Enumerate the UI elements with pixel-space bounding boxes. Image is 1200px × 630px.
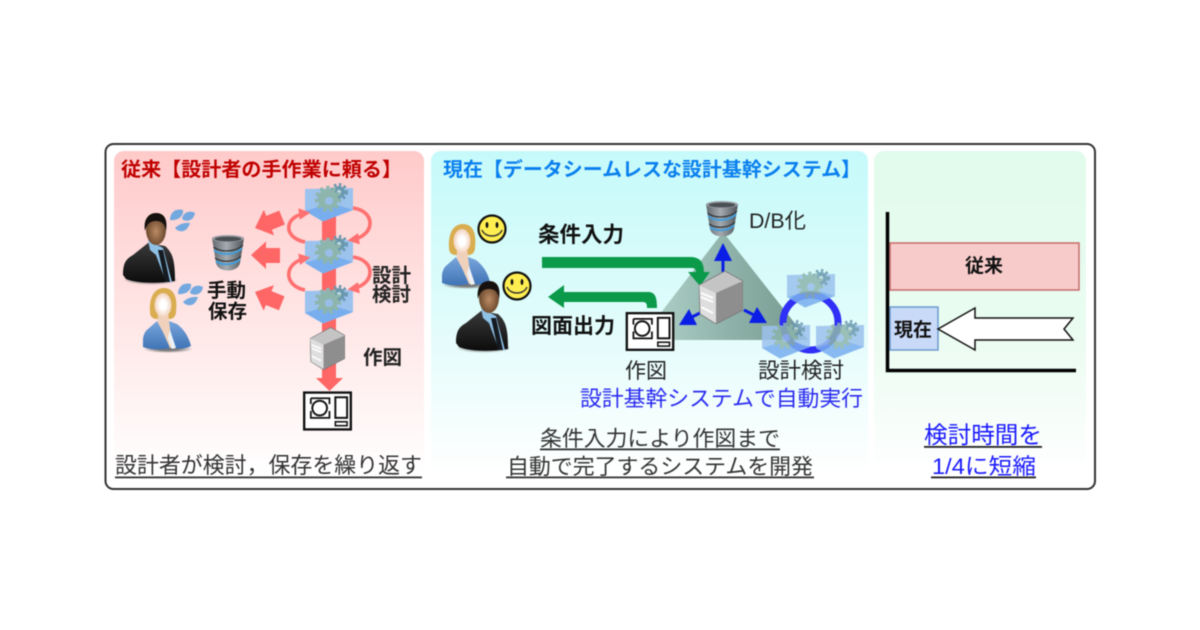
- bar: current: [890, 307, 938, 350]
- chart: time comparison: [888, 212, 1079, 370]
- icon: drawing: [627, 313, 673, 350]
- label: drawing output: 図面出力: [531, 315, 615, 338]
- panel background: [431, 151, 868, 473]
- heading: current: 現在【データシームレスな設計基幹システム】: [443, 158, 861, 181]
- arrows: save to database: [250, 205, 287, 316]
- icon: design cube right: [816, 322, 864, 358]
- bar: current: 現在: [894, 319, 932, 341]
- label: automatic execution: 設計基幹システムで自動実行: [580, 386, 863, 411]
- icon: female user: [442, 224, 492, 289]
- icon: server: [699, 271, 743, 324]
- caption: result: 検討時間を: [924, 422, 1042, 448]
- arrow: input green: [542, 257, 710, 286]
- label: condition input: 条件入力: [538, 223, 624, 247]
- panel: current system: [431, 151, 868, 479]
- icon: smiley 1: [478, 216, 506, 242]
- icon: server: [310, 327, 345, 370]
- icon: design cube left: [762, 322, 810, 358]
- caption: result: [924, 422, 1042, 479]
- arrow: output green: [548, 285, 657, 308]
- icon: database: [212, 235, 244, 270]
- icon: drawing: [304, 393, 351, 429]
- outer frame: [106, 144, 1095, 489]
- panel background: [874, 151, 1086, 473]
- icon: sweat drops male: [170, 210, 195, 231]
- bar: conventional: 従来: [965, 255, 1003, 277]
- icon: male user: [456, 281, 512, 353]
- caption: current: 自動で完了するシステムを開発: [507, 454, 813, 479]
- icon: database: [706, 201, 738, 236]
- arrows: iteration loops: [289, 208, 370, 290]
- arrow: reduction: [938, 308, 1073, 350]
- label: design study: 設計検討: [758, 359, 844, 383]
- caption: result: 1/4に短縮: [932, 454, 1036, 479]
- icon: design cube 2: [305, 236, 353, 274]
- caption: conventional: 設計者が検討，保存を繰り返す: [115, 453, 422, 478]
- bar: conventional: [890, 243, 1079, 290]
- diagram triangle: [640, 232, 808, 340]
- panel: result: [874, 151, 1086, 479]
- icon: male designer: [123, 213, 179, 285]
- label: drafting: 作図: [363, 347, 402, 369]
- icon: sweat drops female: [178, 284, 203, 305]
- icon: smiley 2: [504, 272, 530, 300]
- arrows: blue system flows: [679, 243, 767, 325]
- ring: design loop: [783, 295, 838, 350]
- axes: [888, 212, 1076, 370]
- icon: design cube 1: [305, 184, 353, 222]
- label: design study: 設計: [372, 264, 412, 287]
- caption: current: 条件入力により作図まで: [540, 426, 780, 451]
- heading: conventional: 従来【設計者の手作業に頼る】: [121, 158, 402, 181]
- arrow: vertical process flow: [316, 215, 343, 391]
- label: manual save: 手動: [207, 280, 246, 302]
- icon: design cube 3: [305, 286, 353, 324]
- panel background: [114, 151, 424, 473]
- caption: current: [506, 426, 814, 479]
- label: design study: 検討: [372, 284, 411, 306]
- icon: design cube top: [787, 270, 835, 308]
- label: drafting: 作図: [625, 360, 667, 383]
- label: D/B: D/B化: [749, 210, 806, 233]
- icon: female designer: [143, 288, 193, 353]
- panel: conventional method: [114, 151, 424, 478]
- label: manual save: 保存: [208, 301, 247, 323]
